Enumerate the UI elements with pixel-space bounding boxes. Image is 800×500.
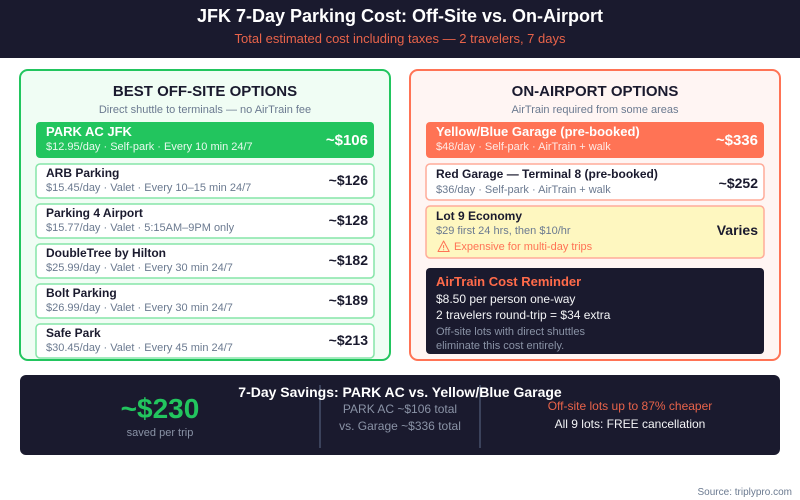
row: Yellow/Blue Garage: $48/day · Self-park · AirTrain + walk <box>436 141 611 153</box>
on-airport heading: ON-AIRPORT OPTIONS <box>512 83 678 100</box>
comparison text <box>339 402 461 433</box>
row: ARB Parking: $15.45/day · Valet · Every 10–15 min 24/7 <box>46 182 251 194</box>
row: PARK AC JFK: PARK AC JFK <box>46 124 133 139</box>
row: Safe Park: $30.45/day · Valet · Every 45 min 24/7 <box>46 342 233 354</box>
savings banner <box>20 375 780 455</box>
callout: AirTrain cost reminder: $8.50 per person one-way <box>436 292 575 306</box>
callout: AirTrain cost reminder: 2 travelers round-trip = $34 extra <box>436 308 611 322</box>
savings caption: saved per trip <box>127 427 193 439</box>
savings divider left <box>319 385 321 448</box>
savings amount: ~$230 <box>121 393 199 424</box>
title: JFK 7-Day Parking Cost: Off-Site vs. On-Airport <box>197 6 603 26</box>
row: ARB Parking: ARB Parking <box>46 166 119 180</box>
comparison text: vs. Garage ~$336 total <box>339 419 461 433</box>
row: Bolt Parking <box>36 284 374 318</box>
row: Red Garage <box>426 164 764 200</box>
subtitle: Total estimated cost including taxes — 2 travelers, 7 days <box>235 31 566 46</box>
row: DoubleTree by Hilton: $25.99/day · Valet · Every 30 min 24/7 <box>46 262 233 274</box>
off-site subheading: Direct shuttle to terminals — no AirTrain fee <box>99 104 311 116</box>
row: Lot 9 Economy: Expensive for multi-day trips <box>454 241 593 253</box>
callout: AirTrain cost reminder: Off-site lots with direct shuttles <box>436 326 585 338</box>
row: Red Garage: ~$252 <box>719 175 758 191</box>
source: Source: triplypro.com <box>698 487 792 498</box>
callout: AirTrain cost reminder <box>426 268 764 354</box>
panel: on-airport options <box>410 70 780 360</box>
row: Safe Park <box>36 324 374 358</box>
row: Safe Park: Safe Park <box>46 326 101 340</box>
row: PARK AC JFK <box>36 122 374 158</box>
row: Red Garage: Red Garage — Terminal 8 (pre-booked) <box>436 167 658 181</box>
on-airport subheading: AirTrain required from some areas <box>511 104 679 116</box>
savings title: 7-Day Savings: PARK AC vs. Yellow/Blue Garage <box>238 384 562 400</box>
callout: AirTrain cost reminder: AirTrain Cost Reminder <box>436 274 581 289</box>
row: ARB Parking: ~$126 <box>329 172 368 188</box>
row: DoubleTree by Hilton: ~$182 <box>329 252 368 268</box>
row: DoubleTree by Hilton <box>36 244 374 278</box>
row: PARK AC JFK: ~$106 <box>326 132 368 149</box>
row: Lot 9 Economy: Lot 9 Economy <box>436 209 522 223</box>
row: Lot 9 Economy <box>426 206 764 258</box>
cancellation note: All 9 lots: FREE cancellation <box>555 417 705 431</box>
row: Bolt Parking: Bolt Parking <box>46 286 117 300</box>
row: Parking 4 Airport: $15.77/day · Valet · 5:15AM–9PM only <box>46 222 235 234</box>
row: DoubleTree by Hilton: DoubleTree by Hilton <box>46 246 166 260</box>
row: ARB Parking <box>36 164 374 198</box>
off-site heading: BEST OFF-SITE OPTIONS <box>113 83 297 100</box>
icon: warning triangle <box>438 241 449 252</box>
header banner <box>0 0 800 58</box>
row: Yellow/Blue Garage: Yellow/Blue Garage (pre-booked) <box>436 124 640 139</box>
row: Parking 4 Airport: ~$128 <box>329 212 368 228</box>
comparison text: PARK AC ~$106 total <box>343 402 457 416</box>
row: Yellow/Blue Garage: ~$336 <box>716 132 758 149</box>
savings divider right <box>479 385 481 448</box>
row: Bolt Parking: ~$189 <box>329 292 368 308</box>
row: Bolt Parking: $26.99/day · Valet · Every 30 min 24/7 <box>46 302 233 314</box>
row: Parking 4 Airport: Parking 4 Airport <box>46 206 143 220</box>
row: PARK AC JFK: $12.95/day · Self-park · Every 10 min 24/7 <box>46 141 253 153</box>
row: Yellow/Blue Garage <box>426 122 764 158</box>
row: Red Garage: $36/day · Self-park · AirTrain + walk <box>436 184 611 196</box>
callout: AirTrain cost reminder: eliminate this cost entirely. <box>436 340 564 352</box>
row: Safe Park: ~$213 <box>329 332 368 348</box>
row: Lot 9 Economy: $29 first 24 hrs, then $10/hr <box>436 225 571 237</box>
cheaper note: Off-site lots up to 87% cheaper <box>548 399 712 413</box>
row: Lot 9 Economy: Varies <box>717 222 758 238</box>
panel: off-site options <box>20 70 390 360</box>
row: Parking 4 Airport <box>36 204 374 238</box>
